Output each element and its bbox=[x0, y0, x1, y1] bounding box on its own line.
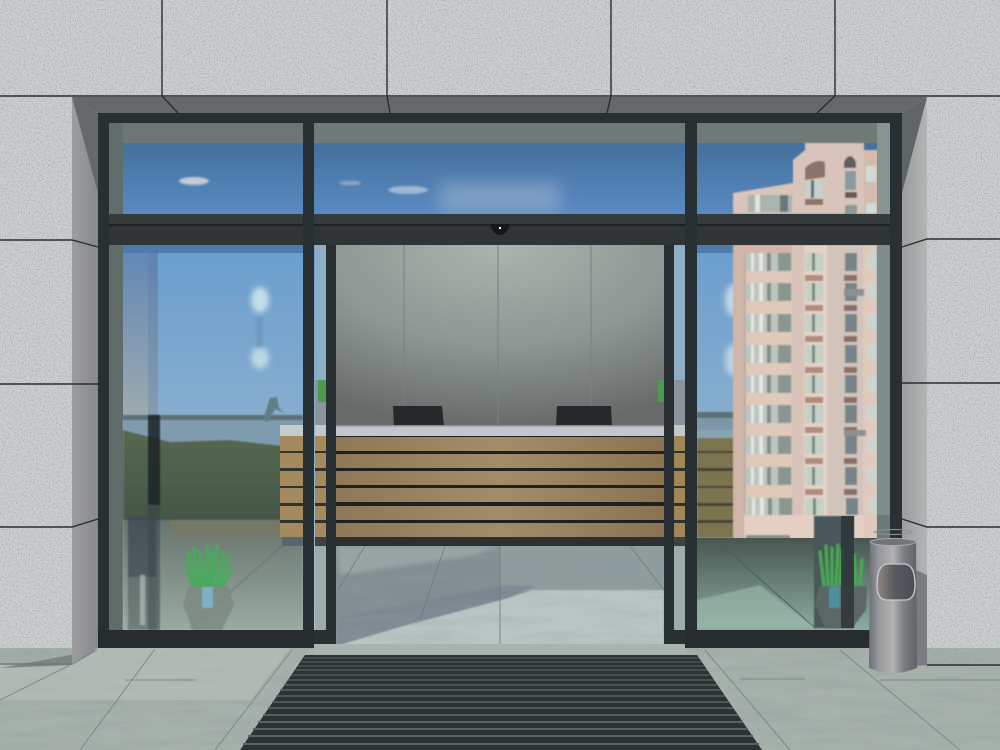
motion sensor bbox=[490, 224, 510, 235]
water and distant shore bbox=[123, 416, 303, 452]
distant shoreline and counter seen through glass bbox=[697, 412, 735, 538]
right wall reveal bbox=[902, 97, 927, 665]
top-left transom glass bbox=[109, 123, 303, 214]
interior reception wall bbox=[336, 245, 664, 427]
reflected bin bbox=[128, 517, 156, 630]
right reception chair bbox=[556, 406, 612, 426]
reflected crane bbox=[263, 397, 284, 422]
soffit above the door bbox=[72, 97, 927, 113]
glass between right sliding leaf and mullion bbox=[658, 245, 685, 630]
reception counter bbox=[336, 425, 664, 546]
reflected plant bbox=[815, 516, 867, 628]
wood counter seen through glass bbox=[280, 425, 303, 546]
right band of glass bbox=[877, 245, 890, 630]
floor: outdoor concrete slabs bbox=[0, 648, 1000, 750]
lower-left glass panel bbox=[109, 245, 326, 630]
lower-right glass panel with building reflection bbox=[697, 245, 890, 630]
door operator header bbox=[109, 214, 890, 245]
interior floor bbox=[314, 546, 686, 655]
wall speckle texture bbox=[0, 0, 1000, 96]
reflected floor bbox=[697, 538, 877, 630]
top-right transom glass with building reflection bbox=[697, 123, 890, 214]
reflected bin post bbox=[814, 516, 854, 628]
bottom rails bbox=[98, 630, 314, 648]
glass glows bbox=[725, 284, 741, 316]
reflected light glows bbox=[251, 287, 269, 313]
reflected trees bbox=[123, 430, 303, 520]
sunlit patch on floor bbox=[336, 590, 664, 650]
left reception chair bbox=[393, 406, 444, 426]
door frame bbox=[98, 113, 902, 648]
ash bin bbox=[869, 530, 927, 673]
entrance floor mat bbox=[240, 655, 762, 750]
reflected floor bbox=[123, 520, 303, 630]
reflected plant bbox=[183, 546, 234, 630]
sliding door leaves bbox=[314, 245, 686, 644]
reflected dark post bbox=[148, 415, 160, 505]
top-centre transom glass bbox=[314, 123, 685, 214]
threshold strip bbox=[314, 644, 686, 655]
reflected apartment tower bbox=[733, 245, 877, 539]
ash bin opening bbox=[877, 564, 915, 600]
floor shadow band bbox=[336, 585, 535, 648]
left wall reveal bbox=[72, 97, 98, 664]
glass between mullion and left sliding leaf bbox=[315, 245, 326, 630]
